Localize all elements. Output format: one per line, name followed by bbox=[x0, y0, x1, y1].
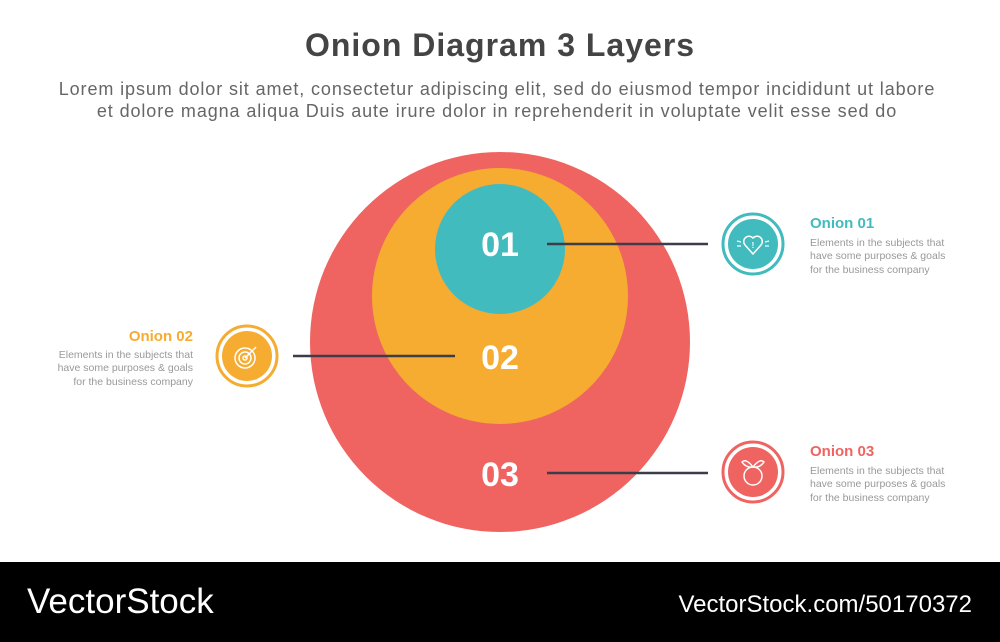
text block: onion 02: have some purposes & goals bbox=[58, 362, 193, 374]
icon: target (onion 02) bbox=[217, 326, 277, 386]
text block: onion 03: for the business company bbox=[810, 492, 930, 504]
title: Onion Diagram 3 Layers bbox=[305, 27, 695, 63]
subtitle: Lorem ipsum dolor sit amet, consectetur adipiscing elit, sed do eiusmod tempor incididunt ut labore bbox=[59, 79, 935, 99]
text block: onion 02 bbox=[58, 328, 194, 388]
icon: heart (onion 01): ! bbox=[752, 241, 754, 250]
subtitle bbox=[59, 79, 935, 121]
text block: onion 03 bbox=[810, 443, 945, 504]
onion diagram: 03 bbox=[481, 456, 519, 494]
footer bar: VectorStock bbox=[27, 582, 214, 621]
footer bar bbox=[0, 562, 1000, 642]
icon: plant (onion 03) bbox=[723, 442, 783, 502]
text block: onion 01 bbox=[810, 215, 945, 276]
text block: onion 02: for the business company bbox=[73, 376, 194, 388]
text block: onion 02: Elements in the subjects that bbox=[59, 349, 193, 361]
text block: onion 01: Onion 01 bbox=[810, 215, 874, 232]
text block: onion 03: Elements in the subjects that bbox=[810, 465, 944, 477]
icon: heart (onion 01) bbox=[723, 214, 783, 274]
text block: onion 01: for the business company bbox=[810, 264, 930, 276]
onion diagram: 01 bbox=[481, 226, 519, 264]
text block: onion 02: Onion 02 bbox=[129, 328, 193, 345]
subtitle: et dolore magna aliqua Duis aute irure dolor in reprehenderit in voluptate velit esse sed do bbox=[97, 101, 897, 121]
text block: onion 01: Elements in the subjects that bbox=[810, 237, 944, 249]
footer bar: VectorStock.com/50170372 bbox=[678, 591, 972, 618]
text block: onion 01: have some purposes & goals bbox=[810, 250, 945, 262]
connector lines bbox=[293, 244, 708, 473]
onion diagram bbox=[310, 152, 690, 532]
text block: onion 03: Onion 03 bbox=[810, 443, 874, 460]
onion diagram: 02 bbox=[481, 339, 519, 377]
text block: onion 03: have some purposes & goals bbox=[810, 478, 945, 490]
